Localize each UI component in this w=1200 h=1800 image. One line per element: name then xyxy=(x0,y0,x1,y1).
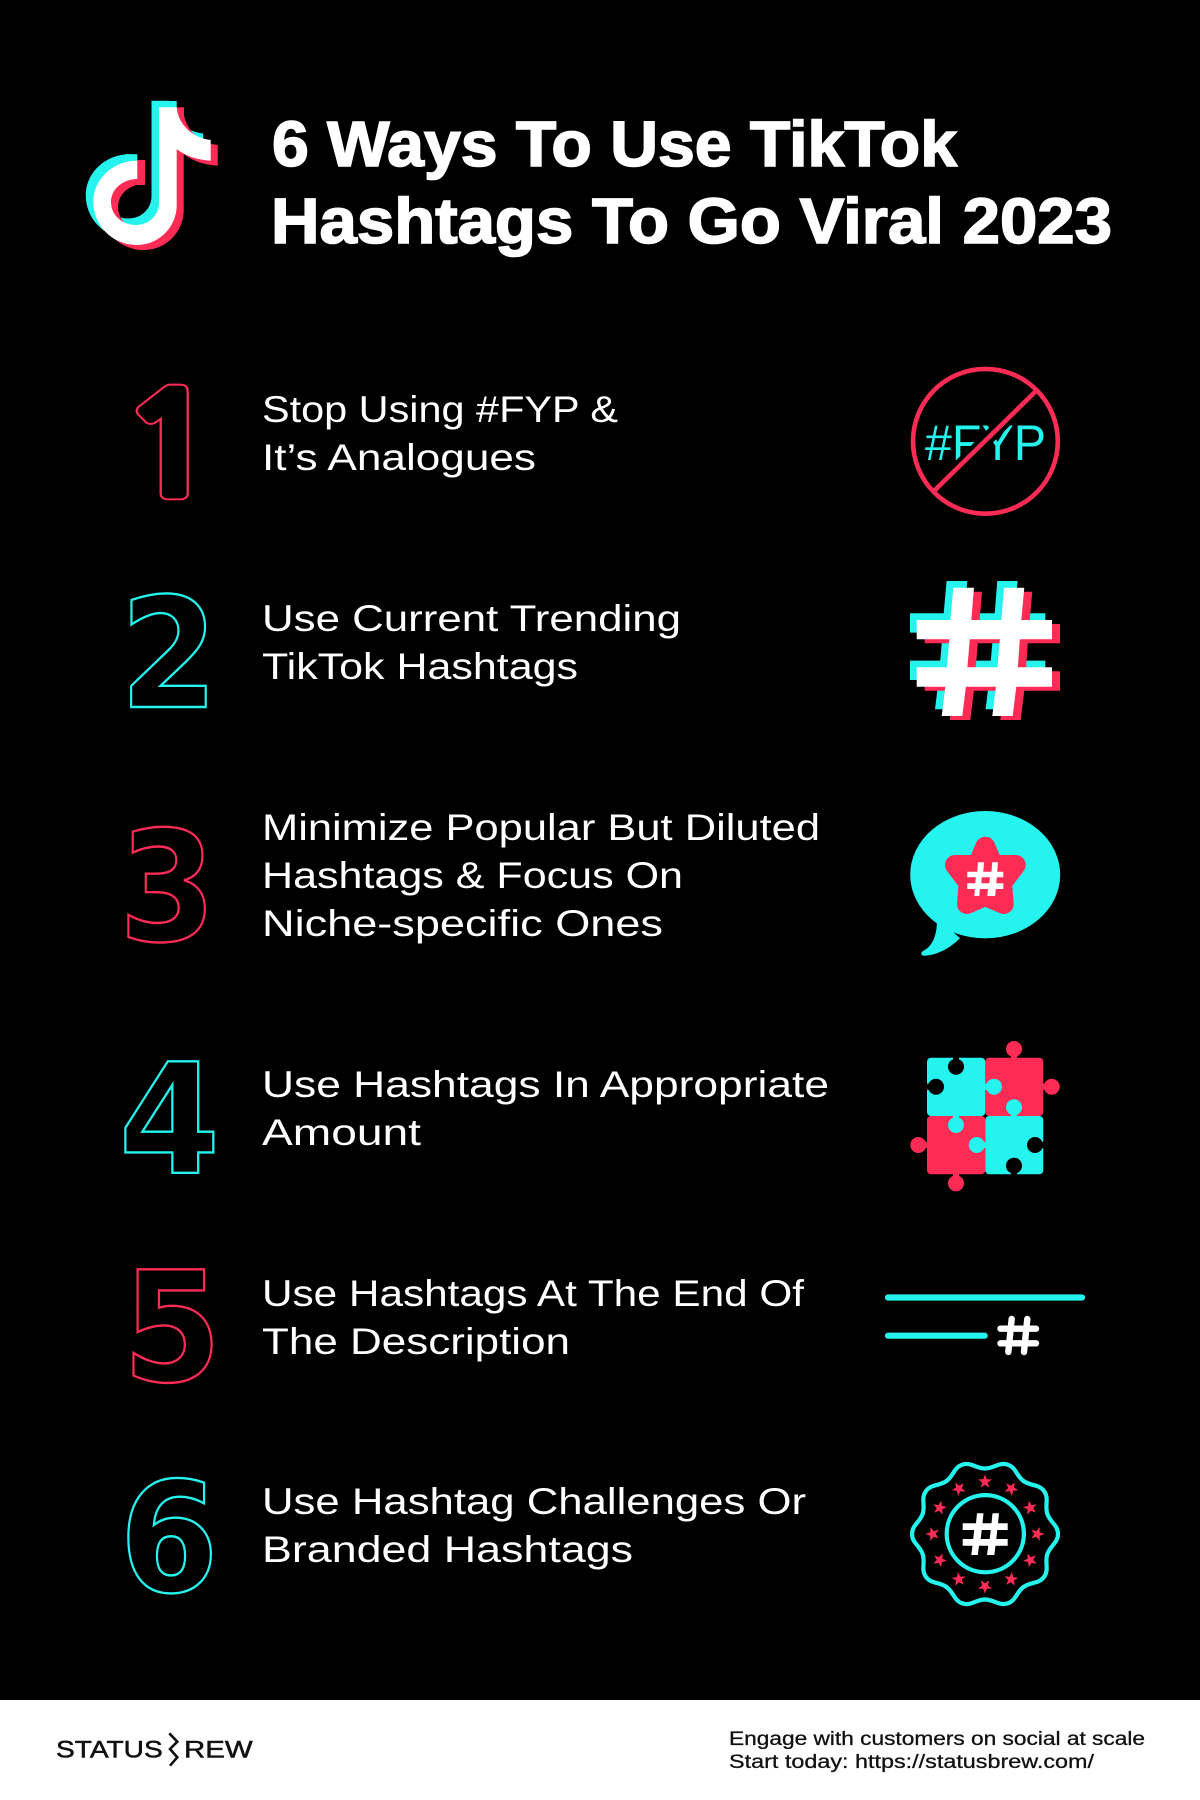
text: item 1: Stop Using #FYP & xyxy=(262,388,618,430)
number 5: 5 xyxy=(122,1239,222,1417)
number 2: 2 xyxy=(120,565,218,743)
text: item 6: Branded Hashtags xyxy=(262,1528,633,1570)
icon: no FYP xyxy=(913,369,1058,514)
panel: item 4 xyxy=(119,1031,1060,1210)
icon: layered hashtag xyxy=(910,581,1060,720)
text: item 4: Amount xyxy=(262,1111,422,1153)
title: 6 Ways To Use TikTok xyxy=(272,108,957,180)
panel: item 1 xyxy=(120,369,1058,516)
number 3: 3 xyxy=(119,799,216,977)
icon: speech bubble with star xyxy=(910,811,1060,956)
footer logo: Statusbrew: STATUS xyxy=(56,1737,163,1764)
text: item 5: The Description xyxy=(262,1320,570,1362)
icon: badge with stars and hashtag xyxy=(906,1455,1064,1613)
text: item 3: Minimize Popular But Diluted xyxy=(262,806,820,848)
icon: description lines with hashtag xyxy=(888,1298,1082,1352)
text: item 2: TikTok Hashtags xyxy=(262,645,578,687)
panel: item 5 xyxy=(122,1239,1082,1417)
panel: item 2 xyxy=(120,565,1060,743)
number 1: 1 xyxy=(120,376,221,516)
icon: no FYP: #FYP xyxy=(925,415,1046,471)
text: item 6: Use Hashtag Challenges Or xyxy=(262,1480,806,1522)
panel: item 3 xyxy=(119,799,1060,977)
text: item 3: Hashtags & Focus On xyxy=(262,854,683,896)
number 1: 1 xyxy=(120,376,221,516)
text: item 3: Niche-specific Ones xyxy=(262,902,663,944)
text: item 1: It’s Analogues xyxy=(262,436,536,478)
icon: puzzle pieces xyxy=(910,1041,1060,1191)
icon: TikTok logo xyxy=(86,101,218,250)
footer logo: Statusbrew: REW xyxy=(184,1737,254,1764)
title: Hashtags To Go Viral 2023 xyxy=(271,185,1112,257)
footer band xyxy=(0,1700,1200,1800)
text: item 2: Use Current Trending xyxy=(262,597,681,639)
footer text: Engage with customers on social at scale xyxy=(729,1728,1145,1750)
footer logo: Statusbrew xyxy=(56,1733,254,1766)
footer text: Start today: https://statusbrew.com/ xyxy=(729,1751,1095,1773)
title xyxy=(271,108,1112,257)
number 4: 4 xyxy=(119,1031,220,1210)
number 6: 6 xyxy=(119,1449,219,1628)
panel: item 6 xyxy=(119,1449,1064,1628)
footer text xyxy=(729,1728,1145,1773)
text: item 5: Use Hashtags At The End Of xyxy=(262,1272,805,1314)
text: item 4: Use Hashtags In Appropriate xyxy=(262,1063,829,1105)
